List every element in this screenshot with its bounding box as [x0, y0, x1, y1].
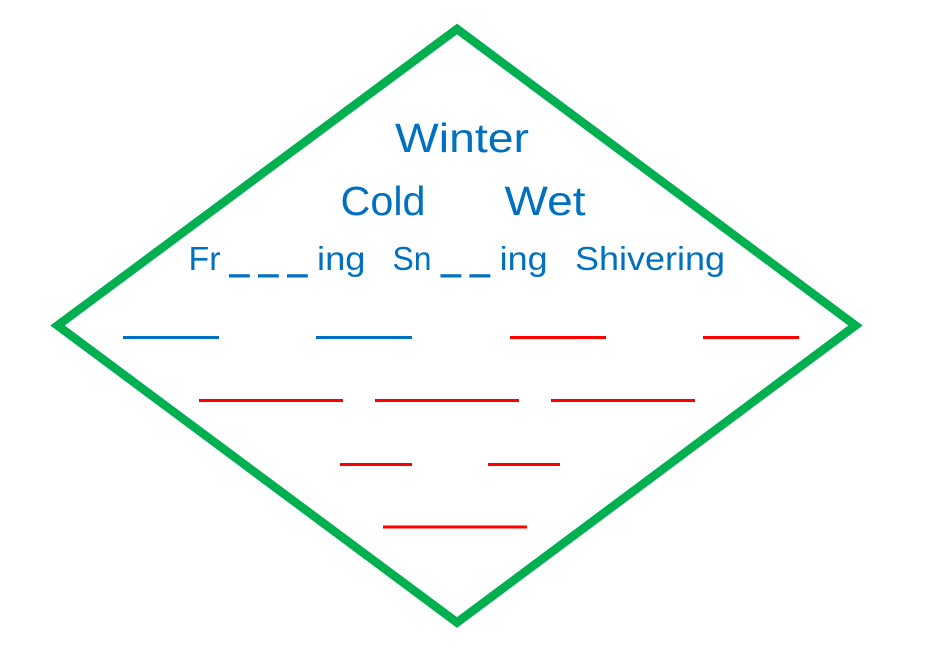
word: Cold: Cold	[340, 178, 426, 224]
blank row 4	[383, 526, 527, 528]
word: Fr _ _ _ ing: _	[287, 240, 308, 278]
word: Fr _ _ _ ing: _	[258, 240, 279, 278]
word: Wet: Wet	[504, 178, 586, 224]
word: Fr _ _ _ ing: Fr	[188, 240, 221, 277]
word: Fr _ _ _ ing: ing	[317, 240, 366, 277]
diamond outline	[58, 29, 856, 622]
word: Fr _ _ _ ing	[188, 240, 366, 278]
word: Sn _ _ ing: ing	[500, 240, 548, 277]
word: Shivering: Shivering	[575, 240, 725, 277]
word: Sn _ _ ing: Sn	[392, 240, 432, 277]
word: Sn _ _ ing: _	[470, 240, 490, 278]
blank row 2	[199, 399, 695, 402]
word: Sn _ _ ing	[392, 240, 548, 278]
word: Sn _ _ ing: _	[440, 240, 462, 278]
word: Fr _ _ _ ing: _	[229, 240, 250, 278]
heading: Winter: Winter	[395, 115, 529, 161]
blank row 3	[340, 463, 560, 466]
blank row 1	[123, 336, 799, 339]
